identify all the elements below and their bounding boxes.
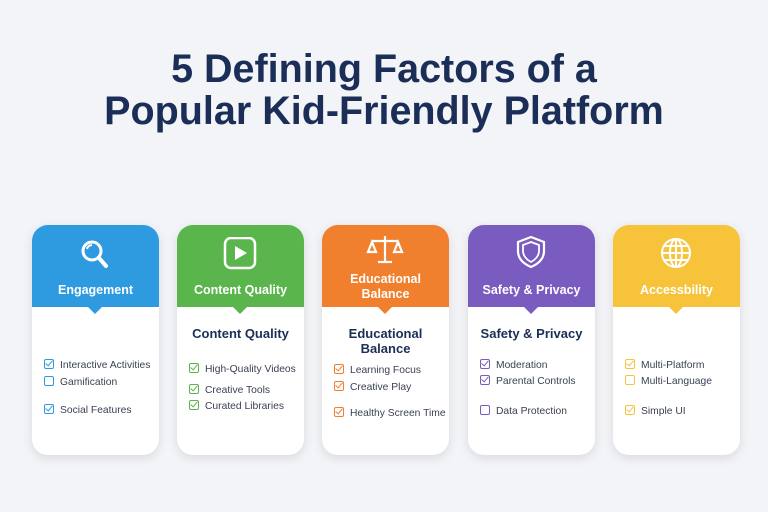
subheading: Safety & Privacy: [481, 326, 582, 341]
label: [350, 272, 421, 301]
title: Popular Kid-Friendly Platform: [104, 89, 664, 133]
checklist: [480, 359, 576, 417]
title: 5 Defining Factors of a: [171, 47, 597, 91]
panel: accessibility: Multi-Language: [641, 376, 712, 387]
icon: globe: [661, 238, 691, 268]
label: Engagement: [58, 283, 133, 297]
panel: engagement: [32, 225, 159, 455]
label: Balance: [362, 287, 409, 301]
panel: safety & privacy: Data Protection: [496, 406, 567, 417]
subheading: [349, 326, 422, 356]
icon: shield: [516, 236, 546, 268]
panel: content quality: Curated Libraries: [205, 401, 284, 412]
panel: educational balance: Healthy Screen Time: [350, 408, 446, 419]
panel: safety & privacy: Parental Controls: [496, 376, 576, 387]
panel: accessibility: Simple UI: [641, 406, 686, 417]
panel: educational balance: [322, 225, 449, 455]
label: Content Quality: [194, 283, 287, 297]
checklist: [44, 359, 150, 416]
subheading: Educational: [349, 326, 422, 341]
icon: magnifier: [82, 240, 108, 268]
panel: content quality: High-Quality Videos: [205, 364, 296, 375]
panel: content quality: Creative Tools: [205, 385, 270, 396]
header: engagement: [32, 225, 159, 307]
label: Safety & Privacy: [482, 283, 580, 297]
panel: safety & privacy: [468, 225, 595, 455]
panel: engagement: Gamification: [60, 377, 117, 388]
header: safety: [468, 225, 595, 307]
icon: play: [224, 237, 256, 270]
panel: content quality: [177, 225, 304, 455]
subheading: Balance: [361, 341, 410, 356]
panel: educational balance: Learning Focus: [350, 365, 421, 376]
title: [104, 47, 664, 133]
icon: scales: [366, 236, 404, 264]
header: educational balance: [322, 225, 449, 307]
panel: engagement: Interactive Activities: [60, 360, 150, 371]
panel: accessibility: [613, 225, 740, 455]
checklist: [189, 363, 296, 412]
panel: safety & privacy: Moderation: [496, 360, 548, 371]
header: content quality: [177, 225, 304, 307]
checklist: [625, 359, 712, 417]
subheading: Content Quality: [192, 326, 289, 341]
label: Accessbility: [640, 283, 713, 297]
header: accessibility: [613, 225, 740, 307]
checklist: [334, 364, 446, 419]
panel: accessibility: Multi-Platform: [641, 360, 705, 371]
panel: engagement: Social Features: [60, 405, 132, 416]
panel: educational balance: Creative Play: [350, 382, 411, 393]
label: Educational: [350, 272, 421, 286]
